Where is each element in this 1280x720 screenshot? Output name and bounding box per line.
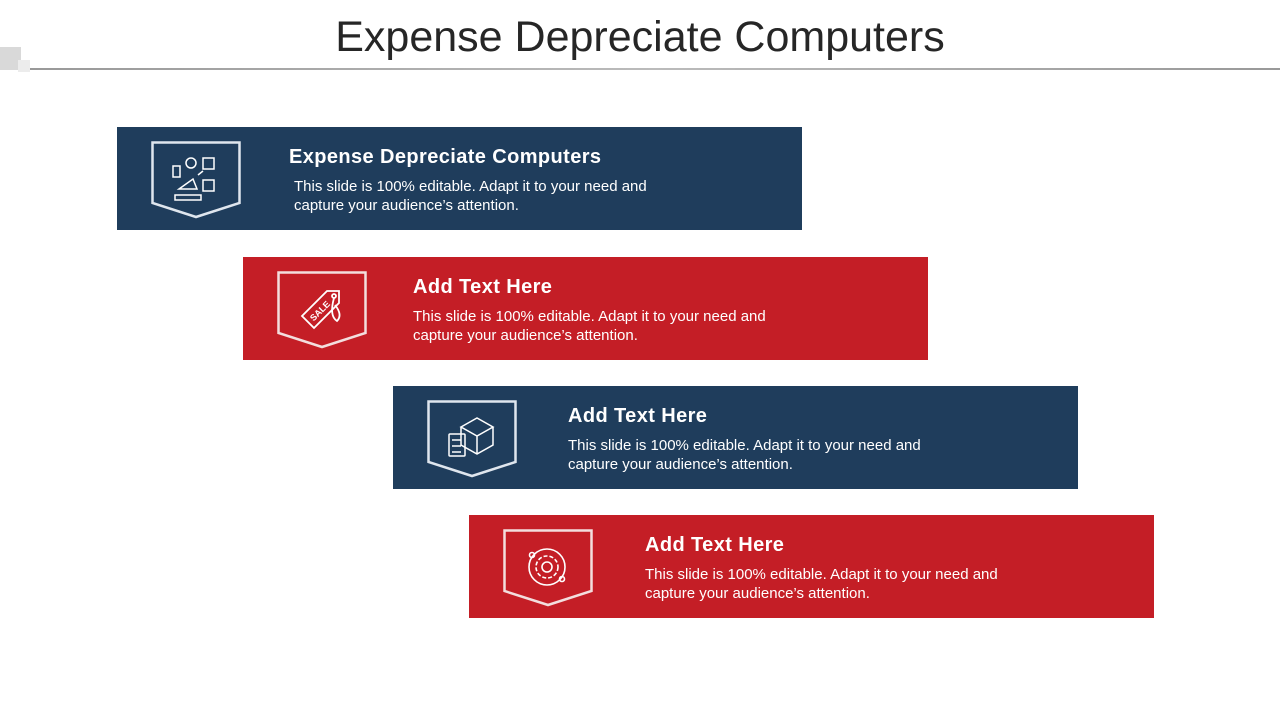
decorative header squares	[0, 47, 21, 70]
text: This slide is 100% editable. Adapt it to your need and capture your audience’s attention.	[645, 566, 998, 602]
text: This slide is 100% editable. Adapt it to your need and capture your audience’s attention.	[294, 178, 647, 214]
panel: 2	[243, 257, 928, 360]
icon: megaphone badge	[151, 141, 241, 218]
panel: 4	[469, 515, 1154, 618]
panel: 1	[117, 127, 802, 230]
heading: Expense Depreciate Computers	[289, 146, 601, 168]
title: Expense Depreciate Computers	[335, 13, 945, 61]
icon: sale tag badge: SALE	[308, 299, 332, 323]
heading: Add Text Here	[645, 534, 784, 556]
text: This slide is 100% editable. Adapt it to your need and capture your audience’s attention.	[413, 308, 766, 344]
icon: box badge	[427, 400, 517, 478]
text: This slide is 100% editable. Adapt it to your need and capture your audience’s attention.	[568, 437, 921, 473]
heading: Add Text Here	[568, 405, 707, 427]
icon: sale tag badge	[277, 271, 367, 348]
heading: Add Text Here	[413, 276, 552, 298]
panel: 3	[393, 386, 1078, 489]
icon: gear badge	[503, 529, 593, 606]
